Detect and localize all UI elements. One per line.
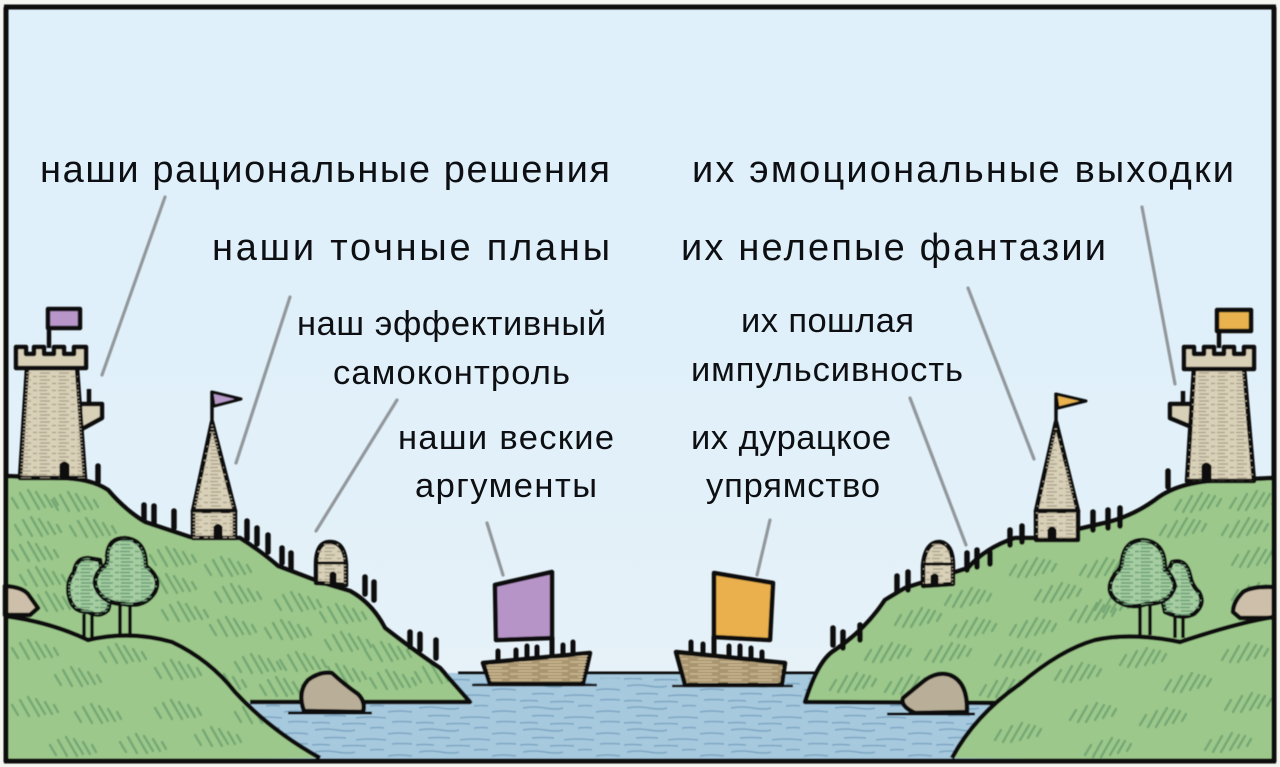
label: foolish stubbornness: упрямство	[706, 467, 880, 505]
orange sail	[714, 573, 773, 640]
left front hill	[5, 616, 320, 760]
right boat planks	[680, 655, 783, 683]
label: foolish stubbornness	[691, 419, 891, 505]
left fence posts	[98, 466, 436, 658]
right front hill	[952, 617, 1274, 760]
left big tower	[16, 308, 102, 478]
right fence posts	[833, 471, 1168, 648]
label: ridiculous fantasies: их нелепые фантазии	[681, 227, 1106, 269]
pointer lines	[102, 197, 1175, 575]
right back hill	[805, 478, 1278, 703]
right trees	[1110, 540, 1202, 638]
left boat planks	[486, 655, 588, 682]
purple sail	[495, 572, 552, 640]
right boat hull	[676, 652, 785, 685]
label: weighty arguments: аргументы	[415, 467, 597, 505]
label: foolish stubbornness: их дурацкое	[691, 419, 891, 457]
right spire tower	[1036, 393, 1086, 540]
water	[240, 673, 1040, 761]
label: emotional outbursts: их эмоциональные выходки	[692, 149, 1234, 191]
left rock on the shore	[5, 586, 38, 615]
label: rational decisions: наши рациональные решения	[40, 149, 610, 191]
right rock on the shore	[1233, 587, 1274, 618]
right big tower	[1170, 310, 1254, 481]
left dome hut	[316, 542, 346, 585]
right boat waterline	[672, 685, 793, 687]
right orange boat	[672, 573, 793, 686]
label: vulgar impulsiveness: импульсивность	[691, 351, 963, 389]
right dome hut	[923, 542, 953, 586]
left purple boat	[472, 572, 597, 685]
left boat oars and mast	[498, 638, 573, 662]
label: vulgar impulsiveness: их пошлая	[741, 302, 914, 340]
left back hill	[5, 476, 470, 702]
left river rock	[288, 673, 372, 713]
label: weighty arguments: наши веские	[398, 419, 614, 457]
left boat waterline	[472, 684, 597, 686]
label: effective self-control: самоконтроль	[333, 354, 570, 392]
right boat oars and mast	[691, 637, 762, 660]
left trees	[68, 538, 157, 637]
right tower side turret	[1170, 391, 1194, 428]
label: vulgar impulsiveness	[691, 302, 963, 389]
label: exact plans: наши точные планы	[212, 227, 610, 269]
left spire tower	[193, 391, 241, 538]
left tower side turret	[80, 389, 102, 430]
right river rock	[887, 674, 975, 714]
left tower flag	[48, 308, 80, 348]
label: effective self-control	[297, 305, 606, 392]
label: effective self-control: наш эффективный	[297, 305, 606, 343]
left boat hull	[483, 653, 590, 684]
right tower flag	[1217, 310, 1251, 348]
label: weighty arguments	[398, 419, 614, 505]
